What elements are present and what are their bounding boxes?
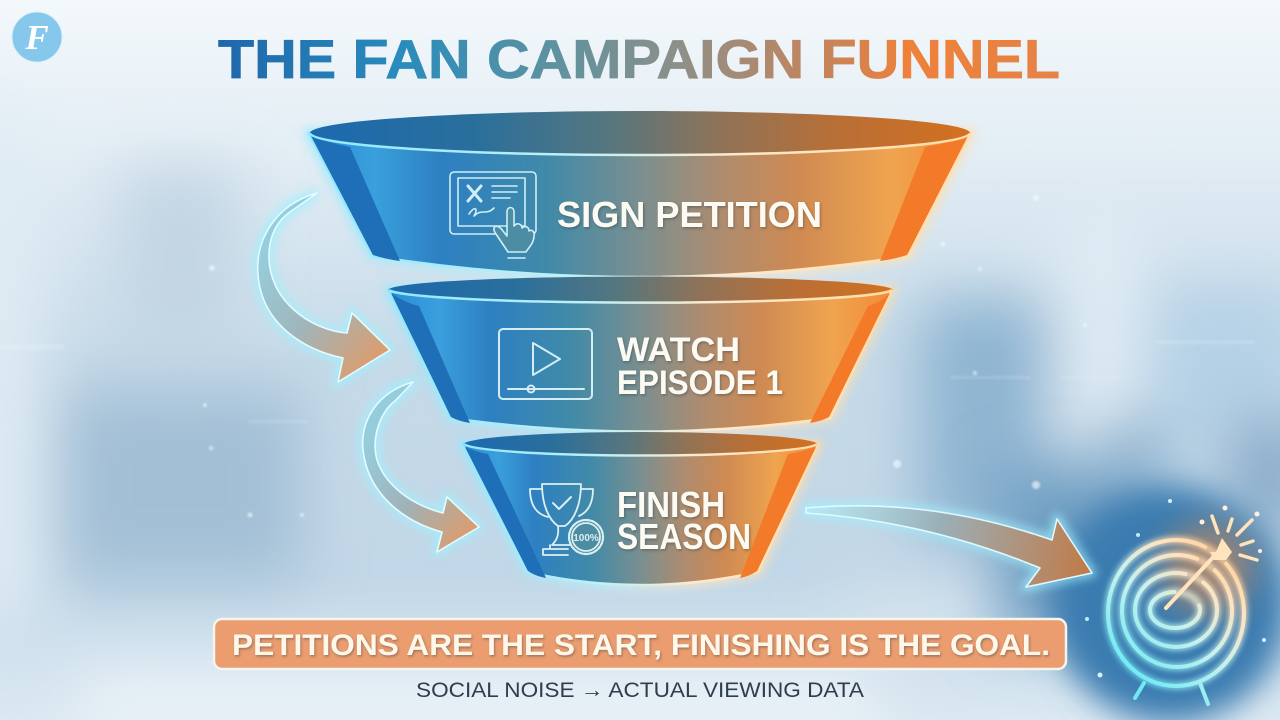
label: watch: WATCH xyxy=(617,331,740,369)
label: sign petition: SIGN PETITION xyxy=(557,194,822,235)
icon: neon target with arrow xyxy=(1085,499,1266,704)
icon: tablet with signature and hand xyxy=(450,172,536,258)
funnel stage 2: watch episode 1 xyxy=(388,276,892,432)
icon: trophy with 100% badge: 100% xyxy=(573,533,599,544)
callout bar xyxy=(214,619,1066,669)
funnel stage 3: finish season xyxy=(463,432,818,585)
logo badge xyxy=(12,12,62,62)
arrow: petition to watch xyxy=(258,193,390,382)
funnel stage 1: sign petition xyxy=(309,111,970,277)
title: THE FAN CAMPAIGN FUNNEL xyxy=(218,28,1060,90)
background light particles xyxy=(0,195,1255,518)
logo badge: F xyxy=(24,18,49,57)
icon: video player xyxy=(499,329,592,399)
label: finish: FINISH xyxy=(617,484,725,525)
subtitle: SOCIAL NOISE → ACTUAL VIEWING DATA xyxy=(416,678,865,702)
icon: trophy with 100% badge xyxy=(530,484,603,555)
callout bar: PETITIONS ARE THE START, FINISHING IS THE GOAL. xyxy=(232,629,1050,662)
arrow: watch to finish xyxy=(363,382,479,552)
label: episode 1: EPISODE 1 xyxy=(617,364,783,402)
arrow: finish to goal xyxy=(806,506,1092,587)
label: season: SEASON xyxy=(617,516,751,557)
